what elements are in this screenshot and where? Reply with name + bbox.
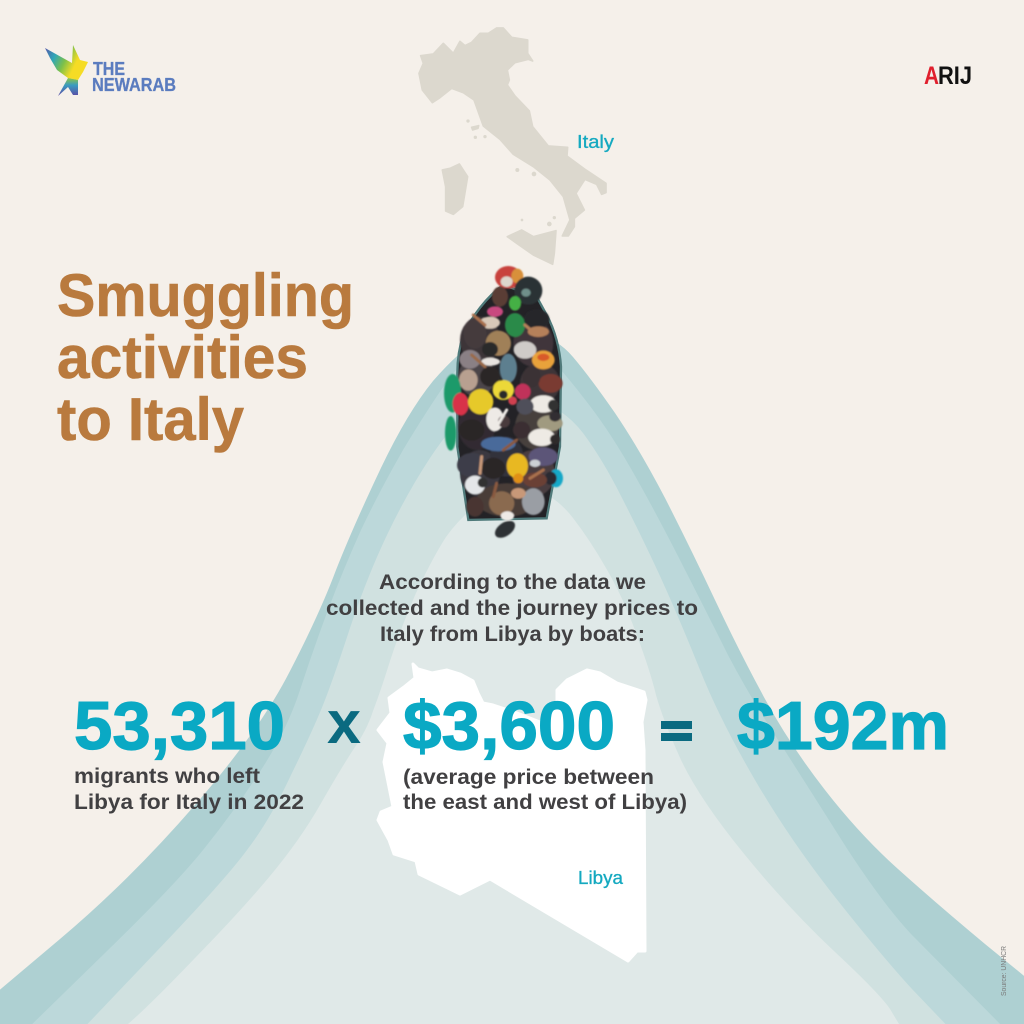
intro text (326, 571, 698, 646)
base crowd (460, 317, 500, 363)
title: activities (57, 324, 308, 391)
label: Libya: Libya (578, 868, 624, 888)
stat: average price: the east and west of Libya) (403, 791, 687, 814)
stat: average price (403, 688, 687, 814)
logo: ARIJ: A (924, 62, 939, 90)
stat: average price: $3,600 (403, 688, 615, 764)
label: Italy: Italy (577, 132, 614, 152)
stat: total: $192m (737, 688, 949, 764)
limbs (472, 315, 543, 497)
logo: The New Arab (45, 45, 176, 96)
boat with migrants (444, 266, 563, 541)
logo: ARIJ (924, 62, 972, 90)
logo: ARIJ: RIJ (938, 62, 972, 90)
intro text: According to the data we (379, 571, 646, 594)
intro text: collected and the journey prices to (326, 597, 698, 620)
multiply sign: x (327, 689, 361, 756)
stat: average price: (average price between (403, 766, 654, 789)
source: Source: UNHCR (1001, 946, 1008, 996)
stat: migrants: Libya for Italy in 2022 (74, 791, 304, 814)
stat: migrants (74, 688, 304, 814)
map: Italy (419, 28, 606, 264)
map: Libya (378, 664, 646, 961)
wordmark: NEWARAB (92, 75, 176, 95)
intro text: Italy from Libya by boats: (380, 623, 645, 646)
people (444, 266, 563, 541)
title: Smuggling (57, 262, 354, 329)
stat: migrants: 53,310 (74, 688, 285, 764)
wordmark: THE (93, 59, 125, 79)
boat hull (457, 285, 561, 520)
stat: migrants: migrants who left (74, 765, 260, 788)
equals sign (661, 721, 692, 741)
title (57, 262, 354, 453)
wave bands (0, 329, 1024, 1024)
title: to Italy (57, 386, 245, 453)
icon: bird (45, 45, 88, 96)
wordmark (92, 59, 176, 95)
